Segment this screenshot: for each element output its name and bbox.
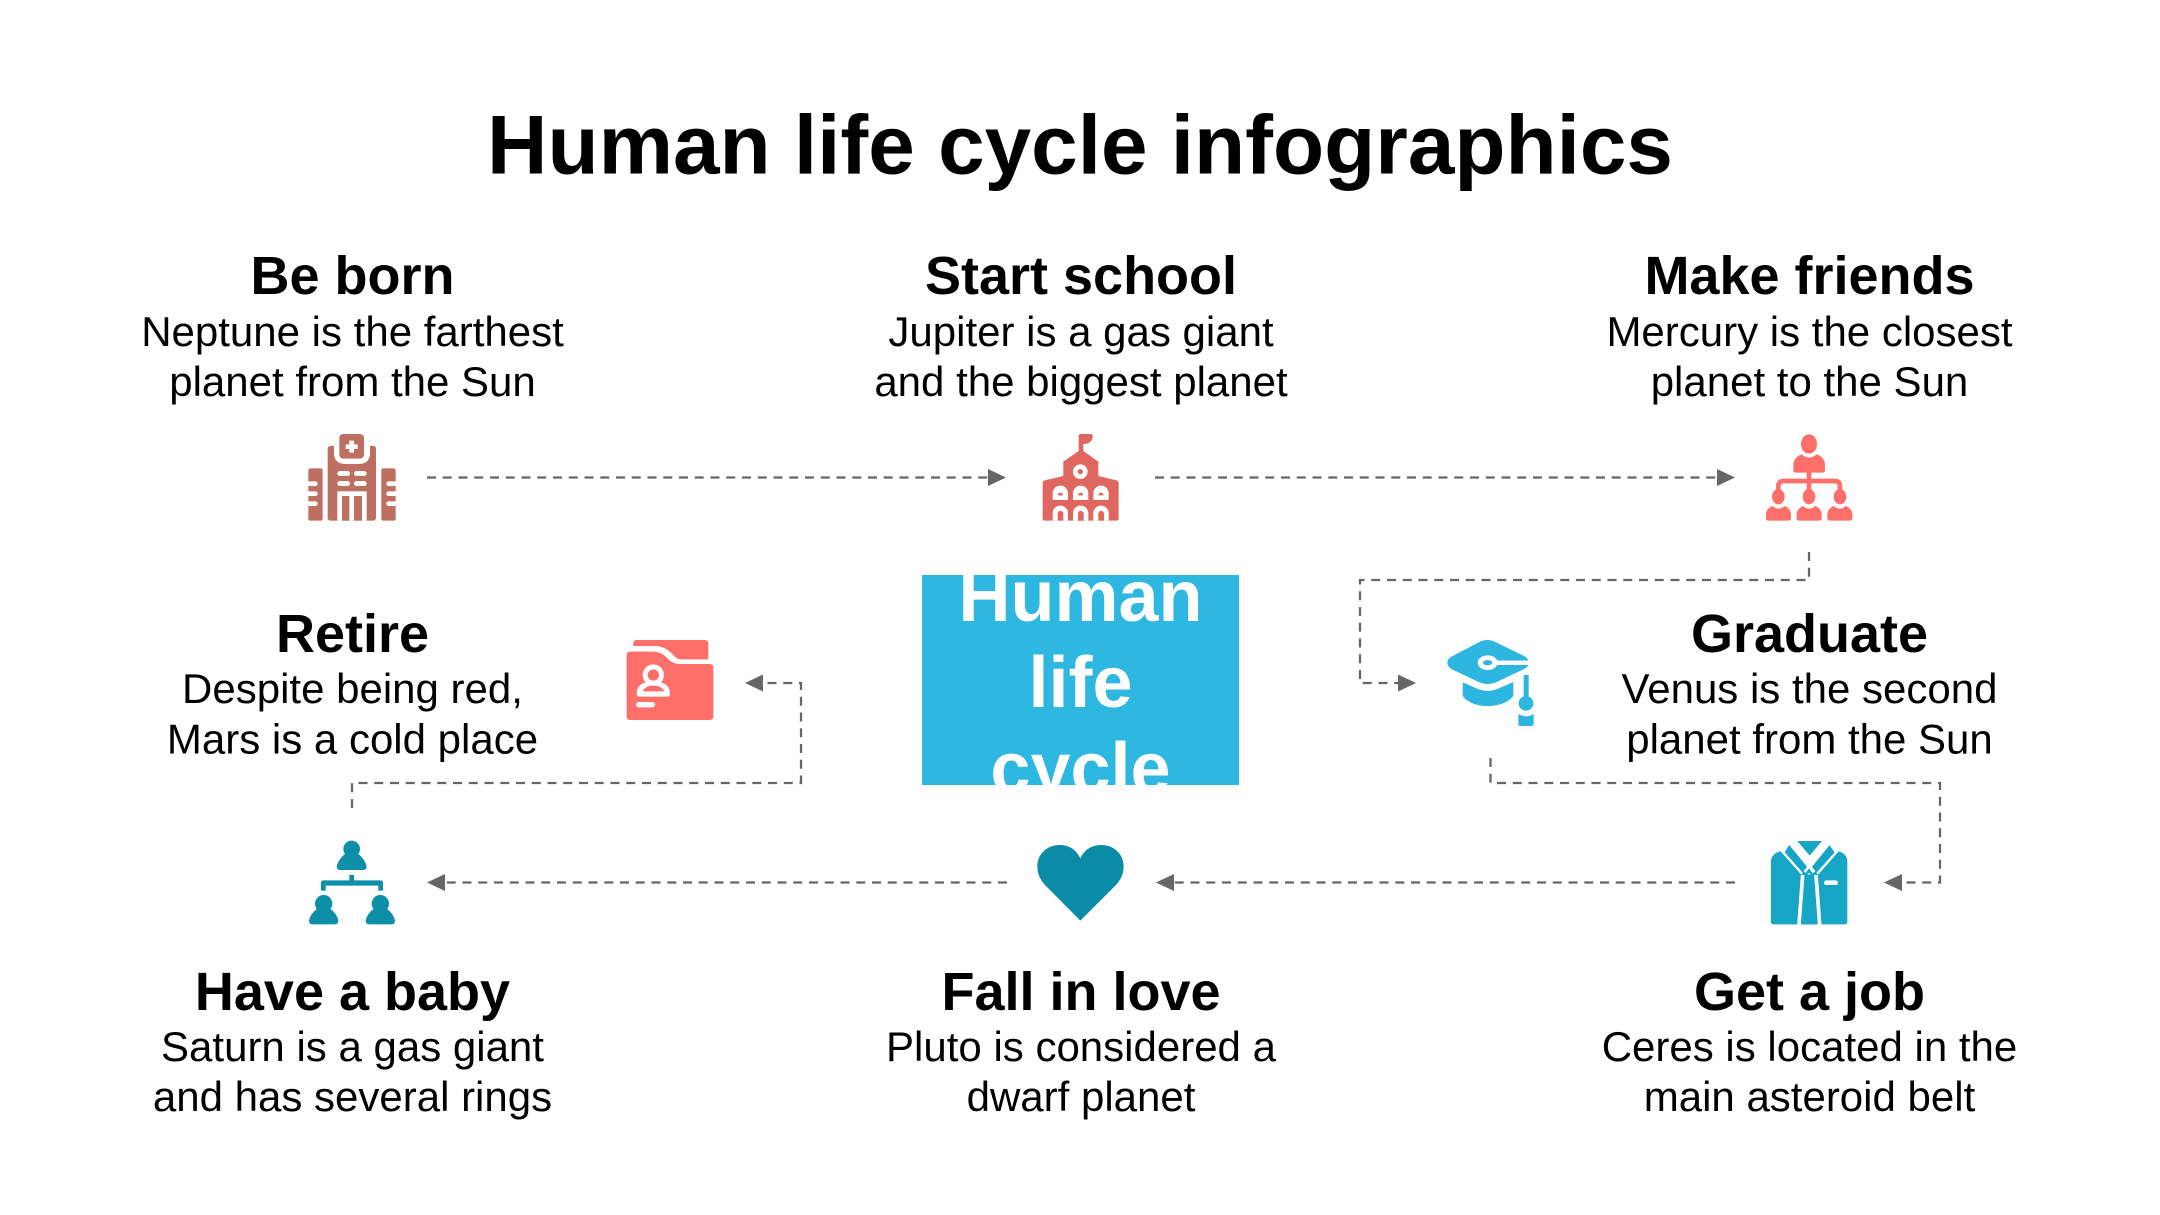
- text block: Fall in love: Pluto is considered a: [886, 1023, 1277, 1070]
- text block: Be born: [141, 246, 564, 405]
- text block: Make friends: [1606, 246, 2013, 405]
- icon: hospital: [307, 434, 397, 521]
- text block: Get a job: Ceres is located in the: [1602, 1023, 2017, 1070]
- text block: Start school: [874, 246, 1288, 405]
- text block: Get a job: [1602, 962, 2017, 1120]
- text block: Graduate: Graduate: [1691, 604, 1928, 664]
- text block: Get a job: main asteroid belt: [1644, 1073, 1976, 1120]
- text block: Have a baby: Have a baby: [195, 962, 510, 1022]
- arrow: Make friends to Graduate: [1360, 552, 1809, 692]
- title: Human life cycle infographics: [487, 98, 1673, 192]
- text block: Be born: planet from the Sun: [169, 358, 536, 405]
- center panel: Human life cycle: Human: [958, 557, 1203, 637]
- center panel: Human life cycle: cycle: [990, 729, 1171, 809]
- text block: Retire: Retire: [276, 604, 429, 664]
- center panel: Human life cycle: [922, 575, 1239, 785]
- text block: Make friends: Mercury is the closest: [1606, 308, 2013, 355]
- icon: suit and tie: [1771, 841, 1847, 924]
- text block: Start school: Jupiter is a gas giant: [888, 308, 1274, 355]
- icon: graduation cap: [1447, 640, 1534, 726]
- text block: Make friends: planet to the Sun: [1651, 358, 1968, 405]
- text block: Graduate: planet from the Sun: [1626, 716, 1993, 762]
- text block: Graduate: Venus is the second: [1622, 665, 1997, 712]
- text block: Get a job: Get a job: [1694, 962, 1925, 1022]
- arrow: Graduate to Get a job: [1490, 758, 1940, 891]
- text block: Be born: Neptune is the farthest: [141, 308, 564, 355]
- text block: Fall in love: [886, 962, 1277, 1120]
- text block: Fall in love: dwarf planet: [967, 1073, 1196, 1120]
- icon: school: [1043, 434, 1119, 521]
- text block: Be born: Be born: [250, 246, 455, 306]
- icon: folder: [627, 640, 713, 720]
- text block: Retire: [167, 604, 538, 762]
- text block: Have a baby: and has several rings: [153, 1073, 552, 1120]
- icon: friends network: [1766, 434, 1852, 521]
- center panel: Human life cycle: life: [1028, 643, 1133, 723]
- text block: Retire: Despite being red,: [182, 665, 523, 712]
- arrow: Have a baby to Retire: [352, 674, 801, 808]
- icon: heart: [1037, 845, 1124, 921]
- text block: Start school: Start school: [925, 246, 1237, 306]
- text block: Fall in love: Fall in love: [941, 962, 1221, 1022]
- icon: family tree: [309, 841, 395, 924]
- text block: Have a baby: Saturn is a gas giant: [161, 1023, 544, 1070]
- text block: Retire: Mars is a cold place: [167, 716, 538, 762]
- arrow: Get a job to Fall in love: [1156, 874, 1735, 891]
- arrow: Be born to Start school: [427, 469, 1006, 486]
- text block: Graduate: [1622, 604, 1997, 762]
- text block: Start school: and the biggest planet: [874, 358, 1288, 405]
- arrow: Fall in love to Have a baby: [427, 874, 1007, 891]
- text block: Have a baby: [153, 962, 552, 1120]
- text block: Make friends: Make friends: [1644, 246, 1975, 306]
- arrow: Start school to Make friends: [1155, 469, 1735, 486]
